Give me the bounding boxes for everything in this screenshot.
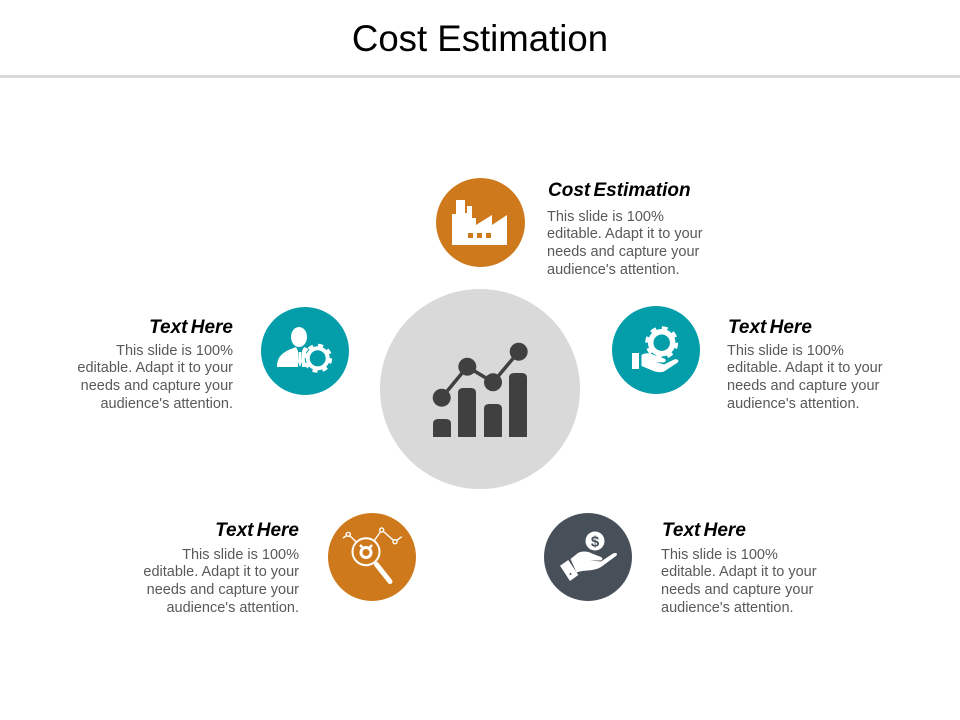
icon: bars and trend line (433, 343, 528, 437)
center circle with bar chart icon (380, 289, 580, 489)
icon: hand holding dollar coin (544, 513, 632, 601)
text block: editable. Adapt it to your (143, 564, 299, 580)
text block: audience's attention. (661, 600, 794, 616)
panel: top item Cost Estimation (436, 178, 703, 278)
text block: needs and capture your (547, 244, 699, 260)
heading: Text Here (149, 317, 233, 338)
text block (547, 208, 703, 278)
icon: hand holding dollar coin: $ (591, 534, 600, 550)
text block: audience's attention. (727, 396, 860, 412)
panel: lower right item Text Here (544, 513, 817, 616)
text block: This slide is 100% (727, 342, 844, 358)
icon: hand holding gear (612, 306, 700, 394)
text block: This slide is 100% (547, 208, 664, 224)
panel: left item Text Here (77, 307, 349, 412)
text block: editable. Adapt it to your (547, 226, 703, 242)
heading: Text Here (215, 520, 299, 541)
text block: editable. Adapt it to your (77, 360, 233, 376)
title: Cost Estimation (352, 18, 608, 59)
icon: businessman with gear (261, 307, 349, 395)
icon: magnifier over line chart (328, 513, 416, 601)
text block (727, 342, 883, 412)
text block: needs and capture your (661, 582, 813, 598)
text block: editable. Adapt it to your (727, 360, 883, 376)
text block (143, 546, 299, 616)
panel: lower left item Text Here (143, 513, 416, 616)
heading: Cost Estimation (548, 180, 691, 200)
heading: Text Here (662, 520, 746, 541)
text block (661, 546, 817, 616)
text block: needs and capture your (727, 378, 879, 394)
text block: needs and capture your (147, 582, 299, 598)
text block: This slide is 100% (661, 546, 778, 562)
text block: audience's attention. (166, 600, 299, 616)
text block: audience's attention. (547, 262, 680, 278)
text block: This slide is 100% (116, 342, 233, 358)
text block: editable. Adapt it to your (661, 564, 817, 580)
text block (77, 342, 233, 412)
heading: Text Here (728, 317, 812, 338)
text block: audience's attention. (100, 396, 233, 412)
text block: needs and capture your (81, 378, 233, 394)
text block: This slide is 100% (182, 546, 299, 562)
panel: right item Text Here (612, 306, 883, 412)
icon: factory (436, 178, 525, 267)
